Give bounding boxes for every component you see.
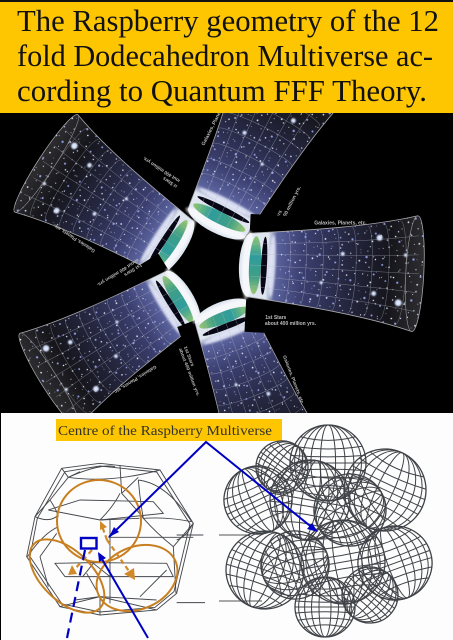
funnel: upper left universe: about 400 million yrs. xyxy=(142,155,185,186)
funnel: upper left universe: Galaxies, Planets, etc. xyxy=(52,222,96,254)
funnel: right universe: 1st Stars xyxy=(265,315,287,321)
funnel: right universe xyxy=(236,207,427,341)
orange circles xyxy=(17,480,188,626)
funnel: top universe: 1st Stars xyxy=(269,209,284,231)
guide lines xyxy=(219,535,262,601)
label: centre of the multiverse xyxy=(56,419,282,441)
title banner: fold Dodecahedron Multiverse ac- xyxy=(17,38,433,73)
funnel: upper left universe: 1st Stars xyxy=(162,175,182,191)
orange dashed arrows xyxy=(68,521,135,580)
diagram: dodecahedron wireframe xyxy=(27,463,205,615)
funnel: right universe: Galaxies, Planets, etc. xyxy=(314,220,367,226)
panel: geometry diagrams xyxy=(1,413,453,640)
funnel: top universe: about 400 million yrs. xyxy=(274,185,303,234)
diagram: raspberry of spheres xyxy=(213,425,442,637)
funnel: right universe: about 400 million yrs. xyxy=(265,321,317,327)
title banner: The Raspberry geometry of the 12 xyxy=(17,3,439,38)
funnel: lower left universe: Galaxies, Planets, etc. xyxy=(112,364,157,395)
blue arrows from label xyxy=(67,442,318,638)
funnel: bottom universe: 1st Stars xyxy=(182,346,195,368)
funnel: top universe xyxy=(160,41,350,259)
title banner xyxy=(0,0,453,113)
funnel: lower left universe: 1st Stars xyxy=(122,262,143,278)
funnel: bottom universe: Galaxies, Planets, etc. xyxy=(281,355,305,406)
funnel: lower left universe: about 400 million yrs. xyxy=(96,257,140,288)
funnel: top universe: Galaxies, Planets, etc. xyxy=(201,97,230,147)
title banner: cording to Quantum FFF Theory. xyxy=(17,73,427,108)
funnel: bottom universe: about 400 million yrs. xyxy=(177,347,201,397)
funnel: bottom universe xyxy=(167,284,333,495)
panel: cosmic timeline image xyxy=(0,0,453,495)
label: centre of the multiverse: Centre of the Raspberry Multiverse xyxy=(58,424,272,439)
funnel: upper left universe xyxy=(8,108,217,301)
funnel: lower left universe xyxy=(11,242,220,431)
